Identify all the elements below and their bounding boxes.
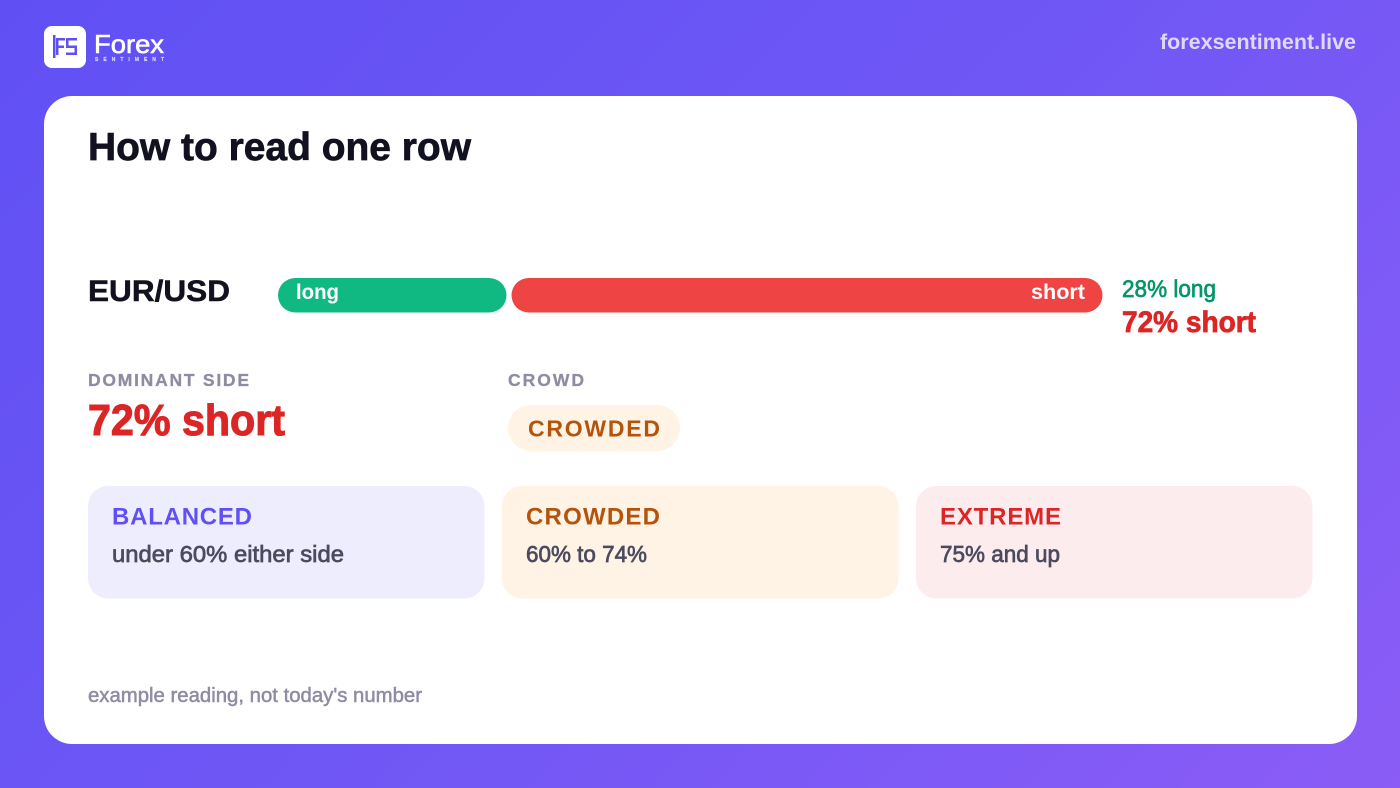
crowded badge: CROWDED [528,416,660,442]
long bar: long [296,281,339,304]
card: crowded: 60% to 74% [526,541,647,567]
short bar: short [1031,281,1085,304]
card: extreme [916,486,1312,598]
dominant side label: DOMINANT SIDE [88,370,249,390]
short percentage: 72% short [1122,306,1256,339]
example row [88,275,1256,339]
footnote: example reading, not today's number [88,685,422,707]
logo wordmark: Forex [94,29,164,59]
card: crowded: CROWDED [526,504,660,530]
card: balanced [88,486,484,598]
card: crowded [502,486,898,598]
short bar [512,278,1102,312]
panel: main card [44,96,1357,744]
crowded badge [508,405,680,451]
card: balanced: under 60% either side [112,541,344,567]
card: extreme: 75% and up [940,541,1060,567]
pair label: EUR/USD [88,275,230,308]
logo [44,26,164,68]
dominant side block [88,370,285,445]
card: extreme: EXTREME [940,504,1061,530]
site url: forexsentiment.live [1160,31,1356,54]
title: How to read one row [88,126,472,169]
logo tagline: SENTIMENT [95,57,164,63]
crowd block [508,370,680,451]
crowd label: CROWD [508,370,584,390]
long percentage: 28% long [1122,276,1216,303]
card: balanced: BALANCED [112,504,252,530]
dominant side value: 72% short [88,396,285,445]
long bar [278,278,506,312]
icon: FS logo tile [44,26,86,68]
